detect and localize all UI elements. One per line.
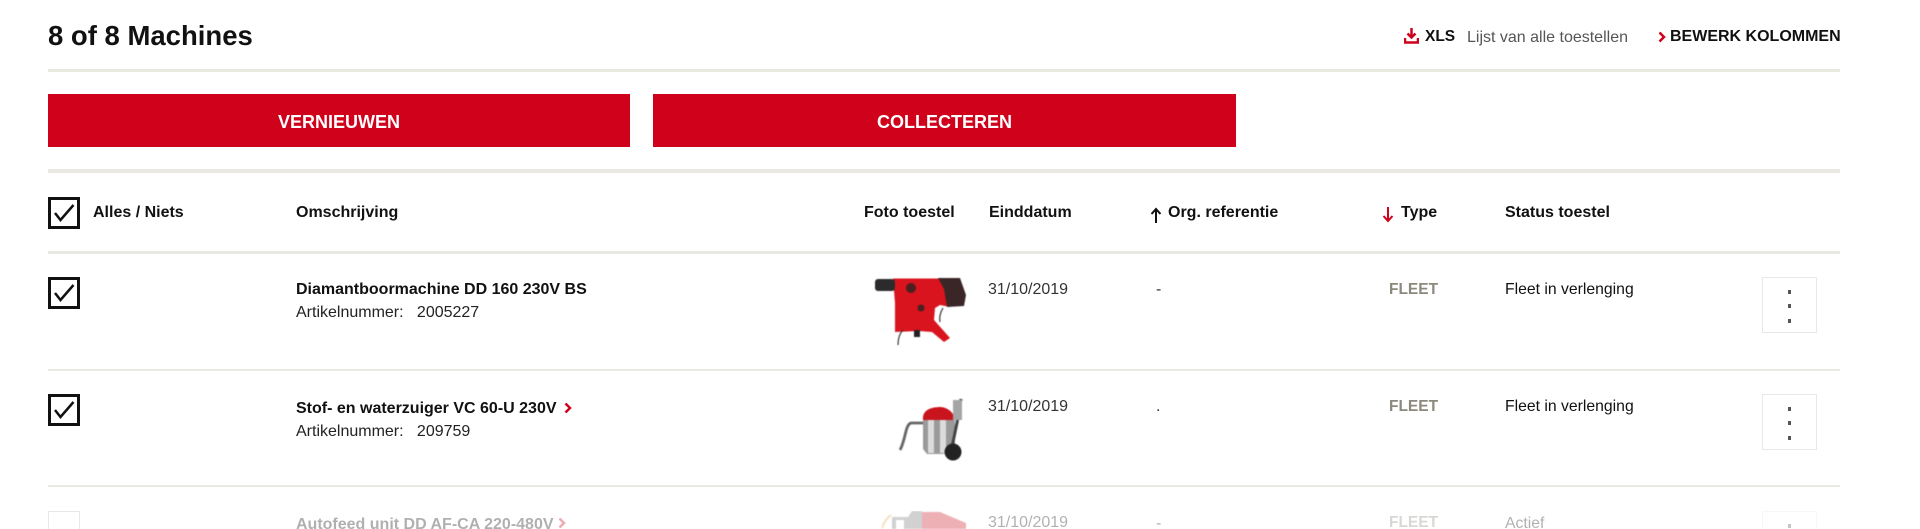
XLS link: XLS xyxy=(1425,28,1455,45)
button: vernieuwen: VERNIEUWEN xyxy=(278,112,400,132)
reference: . xyxy=(1156,398,1160,415)
column: type: Type xyxy=(1401,204,1437,221)
type: FLEET xyxy=(1389,398,1438,415)
button: collecteren: COLLECTEREN xyxy=(877,112,1012,132)
type: FLEET xyxy=(1389,281,1438,298)
list label: Lijst van alle toestellen xyxy=(1467,29,1628,46)
icon: sort down arrow xyxy=(1382,207,1394,222)
checkbox xyxy=(48,277,80,309)
column: foto toestel: Foto toestel xyxy=(864,204,955,221)
icon: sort up arrow xyxy=(1150,208,1162,223)
icon: vacuum photo xyxy=(898,398,964,462)
button: vernieuwen xyxy=(48,94,630,147)
column: alles / niets: Alles / Niets xyxy=(93,204,184,221)
status: Fleet in verlenging xyxy=(1505,281,1634,298)
article number: Artikelnummer: 209759 xyxy=(296,423,470,440)
button: collecteren xyxy=(653,94,1236,147)
article number: Artikelnummer: 2005227 xyxy=(296,304,479,321)
icon: XLS download xyxy=(1404,28,1419,44)
checkbox xyxy=(48,511,80,529)
end date: 31/10/2019 xyxy=(988,398,1068,415)
icon: drill photo xyxy=(874,277,967,346)
reference: - xyxy=(1156,281,1161,298)
row 1 xyxy=(48,277,1817,346)
column: org. referentie: Org. referentie xyxy=(1168,204,1278,221)
machine name: Diamantboormachine DD 160 230V BS xyxy=(296,281,587,298)
kebab menu xyxy=(1762,511,1817,529)
column: omschrijving: Omschrijving xyxy=(296,204,398,221)
row 3 (faded) xyxy=(48,511,1791,529)
icon: chevron xyxy=(564,402,572,414)
end date: 31/10/2019 xyxy=(988,281,1068,298)
column: einddatum: Einddatum xyxy=(989,204,1072,221)
table header xyxy=(48,197,1610,229)
icon: chevron xyxy=(1658,32,1666,42)
icon: chevron xyxy=(558,518,566,528)
row 2 xyxy=(48,394,1817,462)
edit columns link: BEWERK KOLOMMEN xyxy=(1670,28,1841,45)
status: Fleet in verlenging xyxy=(1505,398,1634,415)
checkbox xyxy=(48,394,80,426)
icon: autofeed photo xyxy=(882,511,966,529)
kebab menu xyxy=(1762,277,1817,333)
machine name: Stof- en waterzuiger VC 60-U 230V xyxy=(296,400,557,417)
column: status toestel: Status toestel xyxy=(1505,204,1610,221)
header checkbox xyxy=(48,197,80,229)
kebab menu xyxy=(1762,394,1817,450)
title: 8 of 8 Machines xyxy=(48,20,253,51)
